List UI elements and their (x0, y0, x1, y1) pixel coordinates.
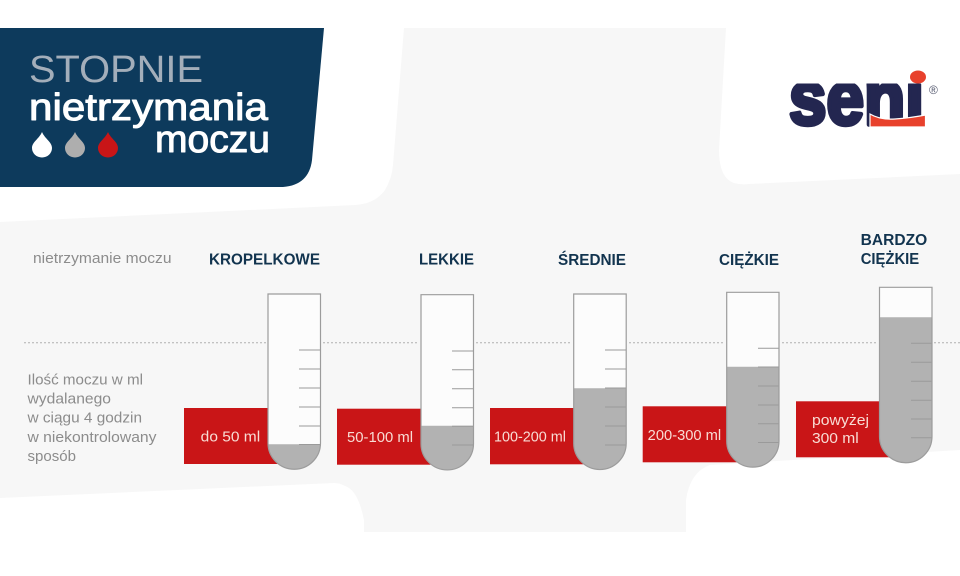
column title: CIĘŻKIE (719, 252, 779, 269)
red amount box (490, 408, 602, 464)
test tube (268, 294, 320, 469)
column title (861, 232, 927, 268)
amount text: 200-300 ml (648, 428, 721, 444)
logo dot (910, 70, 926, 84)
test tube (727, 292, 779, 467)
red amount box (337, 409, 449, 465)
test tube (574, 294, 626, 470)
text block: amount description: wydalanego (26, 391, 111, 407)
amount text: powyżej (812, 413, 869, 429)
logo swoosh (870, 114, 926, 127)
column: bardzo ciezkie (796, 232, 932, 463)
heading: nietrzymania: nietrzymania (29, 87, 269, 129)
red amount box (643, 406, 755, 462)
amount text: do 50 ml (201, 430, 260, 446)
logo: seni: seni (789, 56, 924, 142)
column title: ŚREDNIE (558, 251, 626, 269)
heading: STOPNIE: STOPNIE (29, 49, 203, 91)
text block: amount description (26, 372, 157, 465)
text block: amount description: w niekontrolowany (26, 430, 157, 446)
column title: CIĘŻKIE (861, 251, 919, 268)
column: ciezkie (643, 252, 779, 467)
text block: amount description: Ilość moczu w ml (28, 372, 143, 388)
registered mark: ® (929, 83, 938, 97)
test tube (421, 295, 474, 470)
column: lekkie (337, 252, 474, 470)
column: kropelkowe (184, 252, 320, 469)
red amount box (796, 401, 908, 457)
test tube (880, 287, 932, 463)
amount text: 50-100 ml (347, 430, 413, 446)
amount text (812, 413, 869, 447)
column title: LEKKIE (419, 252, 474, 268)
amount text: 100-200 ml (494, 430, 566, 446)
red amount box (184, 408, 296, 464)
text block: amount description: w ciągu 4 godzin (26, 411, 142, 427)
text block: amount description: sposób (28, 449, 76, 465)
logo: seni (789, 70, 938, 128)
icon: white drop (32, 132, 52, 158)
column: srednie (490, 251, 626, 470)
heading: moczu: moczu (155, 119, 270, 161)
column title: BARDZO (861, 232, 927, 249)
row label: nietrzymanie moczu: nietrzymanie moczu (33, 251, 172, 267)
amount text: 300 ml (812, 431, 859, 447)
header panel (0, 28, 324, 187)
icon: gray drop (65, 132, 85, 158)
icon: red drop (98, 132, 118, 158)
column title: KROPELKOWE (209, 252, 320, 269)
